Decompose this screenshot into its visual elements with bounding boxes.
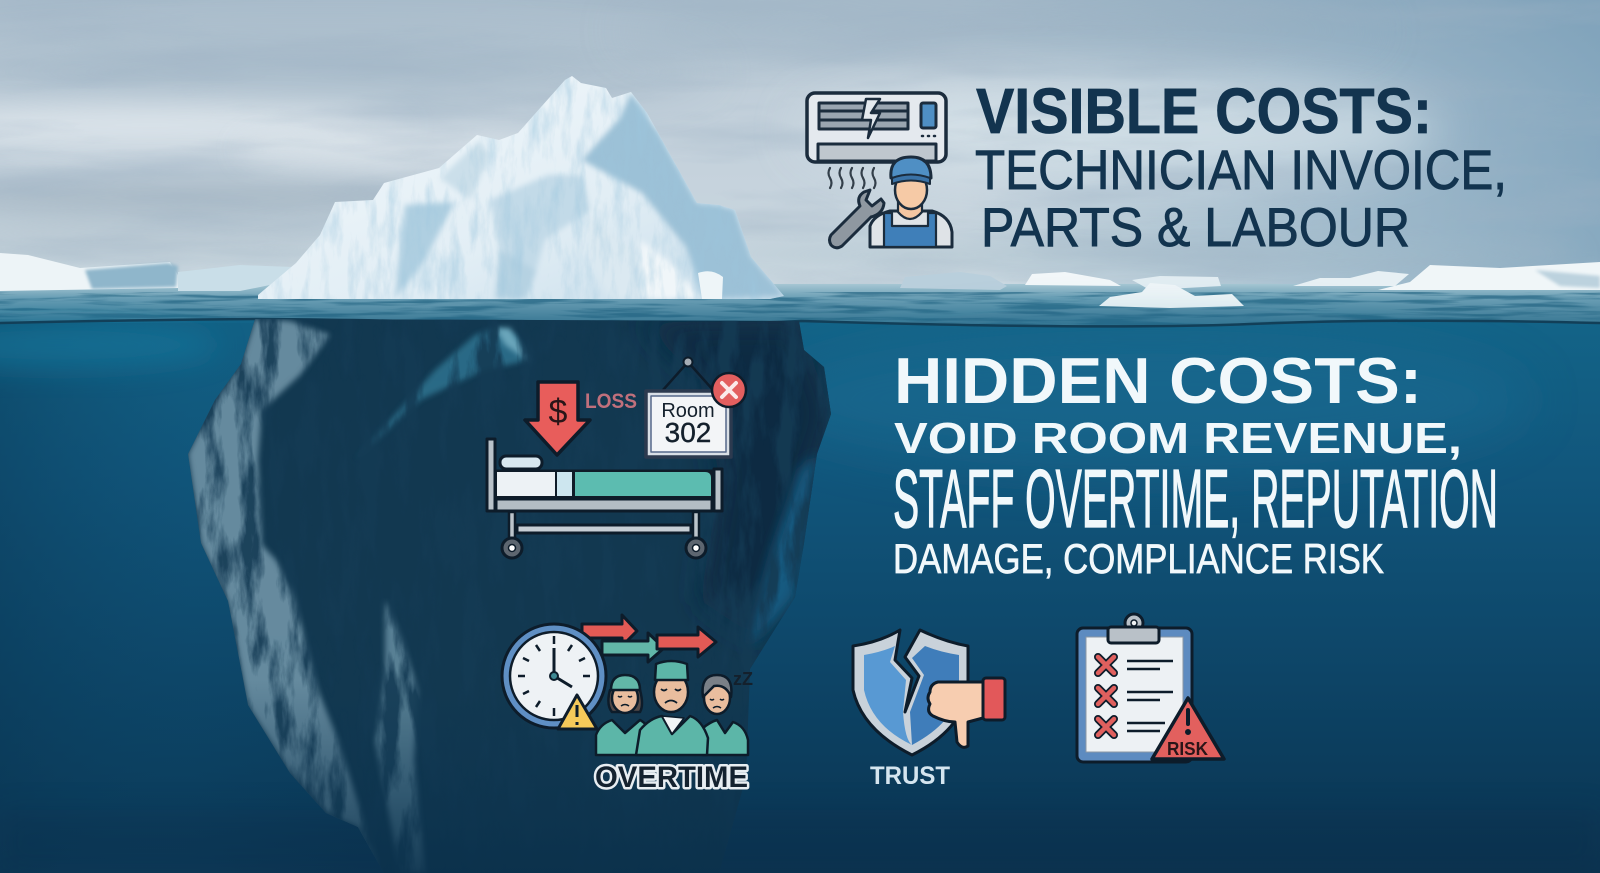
hidden costs line: void room revenue: VOID ROOM REVENUE, xyxy=(894,414,1462,463)
icon: compliance clipboard with risk warning xyxy=(1077,614,1224,762)
technician xyxy=(870,157,952,247)
room sign: 302 xyxy=(665,417,711,448)
overtime arrows xyxy=(582,615,716,662)
nurse middle xyxy=(636,661,708,755)
loss arrow: $ xyxy=(549,393,568,431)
sleep letters: zZ xyxy=(733,669,753,689)
icon: broken shield and thumbs down xyxy=(853,630,1005,790)
wrench xyxy=(830,190,884,248)
risk triangle: RISK xyxy=(1167,739,1208,759)
background: distant ice floes xyxy=(0,253,1600,308)
room sign xyxy=(646,358,746,457)
bed xyxy=(487,439,722,558)
iceberg above water xyxy=(250,70,790,305)
nurse left xyxy=(596,675,650,755)
heading: hidden costs: HIDDEN COSTS: xyxy=(894,344,1422,417)
shield xyxy=(853,630,968,755)
cold air waves xyxy=(828,168,876,188)
room sign: Room xyxy=(661,400,715,422)
iceberg below water xyxy=(180,318,840,873)
visible costs detail line 1: TECHNICIAN INVOICE, xyxy=(975,138,1507,201)
hidden costs line: damage, compliance risk: DAMAGE, COMPLIANCE RISK xyxy=(893,535,1384,582)
overtime label: OVERTIME xyxy=(595,761,748,794)
heading: hidden costs xyxy=(893,344,1498,582)
clipboard paper xyxy=(1086,637,1183,752)
icon: hospital bed with revenue loss and room sign xyxy=(487,358,746,558)
loss arrow xyxy=(525,382,590,455)
thumbs down xyxy=(928,678,1005,747)
heading: visible costs xyxy=(975,75,1507,258)
clock xyxy=(502,624,606,728)
checklist lines xyxy=(1127,661,1173,731)
background: deep water xyxy=(0,319,1600,873)
clipboard board xyxy=(1077,628,1192,762)
icon: clock, arrows and tired staff xyxy=(502,615,753,794)
visible costs detail line 2: PARTS & LABOUR xyxy=(981,196,1410,258)
air conditioner unit xyxy=(807,93,946,162)
heading: visible costs: VISIBLE COSTS: xyxy=(976,75,1432,147)
loss label: LOSS xyxy=(585,390,637,413)
trust label: TRUST xyxy=(870,762,950,790)
warning triangle xyxy=(558,695,597,729)
risk triangle xyxy=(1152,698,1224,759)
checklist crosses xyxy=(1098,657,1114,735)
nurse right xyxy=(703,675,748,755)
background: water surface xyxy=(0,284,1600,330)
clipboard clip xyxy=(1108,614,1159,643)
background: sky xyxy=(0,0,1600,300)
icon: broken air conditioner and technician xyxy=(807,93,952,248)
